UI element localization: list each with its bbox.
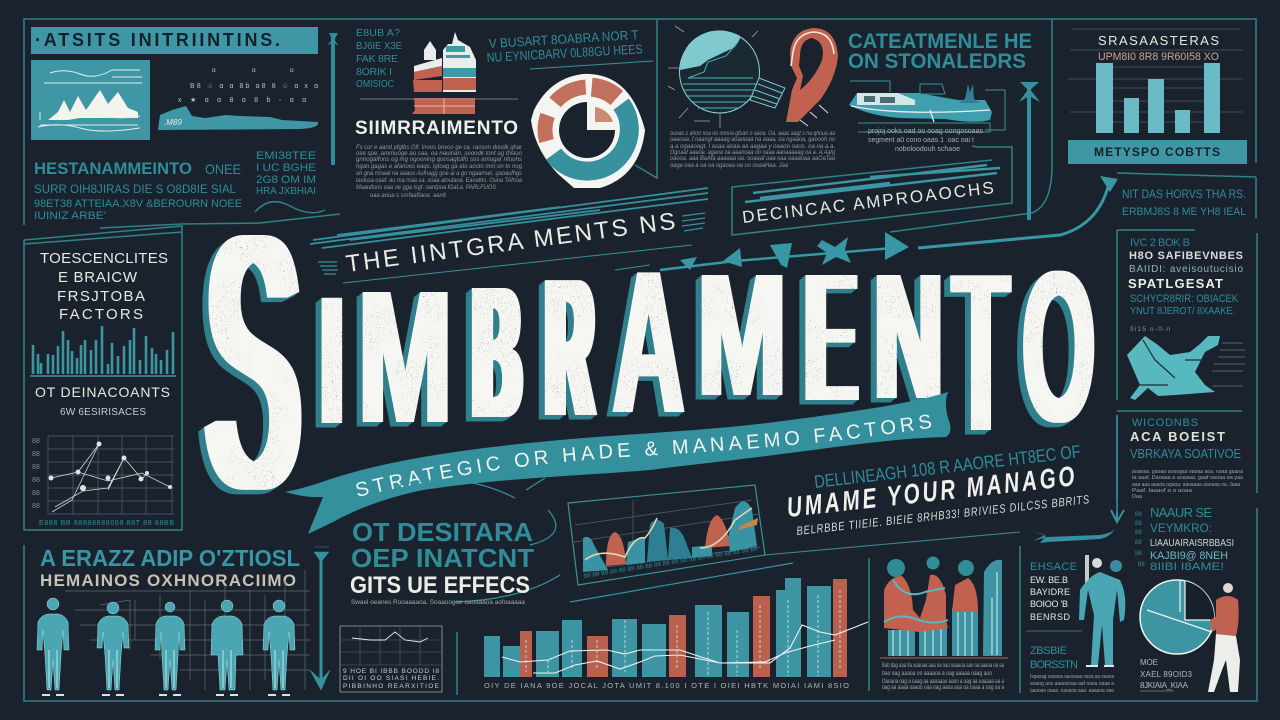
arrow: bottom chevron leader — [765, 415, 1124, 555]
text column beside worker: BENRSD — [1030, 612, 1070, 622]
chart: top-right bars: UPM8I0 8R8 9R60I58 XO — [1098, 51, 1219, 63]
factors heading: TOESCENCLITES — [40, 250, 168, 267]
text column beside worker: BOIOO 'B — [1030, 599, 1068, 609]
line chart — [32, 436, 174, 527]
stacked text: 9i15 o-0-n — [1130, 326, 1170, 333]
heading — [40, 545, 300, 590]
stacked text — [1128, 237, 1243, 333]
figure 3 — [155, 602, 185, 695]
ribbon banner — [285, 392, 950, 534]
text stack above pie: VEYMKRO: — [1150, 521, 1212, 535]
text column beside worker: EHSACE — [1030, 561, 1077, 573]
scattered marks with island: x ★ ɑ ɑ 8 ɑ 8 b - ɑ ɑ — [178, 96, 306, 104]
text stack above pie: 68 — [1135, 512, 1142, 518]
right panel: academy text — [1130, 417, 1244, 500]
heading: HEMAINOS OXHNORACIIMO — [40, 571, 296, 590]
line chart: 88 — [32, 451, 40, 458]
block heading: SIIMRRAIMENTO — [355, 118, 518, 139]
globe with lens — [668, 26, 785, 128]
side note: HRA JXBHIAI — [256, 186, 316, 197]
panel: workers with grid — [37, 545, 310, 695]
factors heading: FACTORS — [59, 306, 143, 323]
main title: S — [208, 161, 298, 563]
block: manage your text: UMAME YOUR MANAGO — [785, 460, 1079, 523]
scattered marks with island: .M89 — [164, 118, 182, 127]
scattered marks with island: B8 ♧ ɑ ɑ 8b ɑ8 8 ♧ ɑ x ɑ — [190, 82, 318, 90]
text column beside worker: ZBSBIE — [1030, 645, 1067, 657]
pie caption — [1140, 658, 1193, 691]
panel: building and simbramento block — [355, 27, 523, 199]
right panel: academy text: aaa aaa aaaoa ogaoa. aaoaaaa aaoaaa oa. Jaaa — [1132, 482, 1241, 488]
text column beside worker: Ixgaoag oaoaoa aaooaaa oaoa aa oaaoa — [1030, 674, 1115, 680]
icon: red hook — [786, 28, 838, 126]
right text: horvs: NIT DAS HORVS THA RS. — [1122, 187, 1246, 201]
pie caption: 8JKIAIA_KIAA — [1140, 681, 1189, 690]
main title: E — [806, 237, 855, 439]
line chart: 88 — [32, 503, 40, 510]
map grid — [65, 570, 310, 690]
figure: standing worker — [1079, 555, 1125, 666]
heading: catchment: CATEATMENLE HE — [848, 30, 1032, 53]
side note: 2G8 OM IM — [256, 174, 316, 186]
heading: catchment: ON STONALEDRS — [848, 50, 1026, 73]
header band — [31, 27, 318, 54]
text stack above pie: 88 — [1135, 540, 1142, 546]
paragraph — [356, 145, 523, 199]
globe caption paragraph: Ogoaaf aaaoa. agaoa oa aaaooaa oo oaaa aaoaaaaag oa a. A.Aafg — [670, 150, 836, 156]
arrow: tall up arrow — [327, 33, 339, 165]
stacked text: IVC 2 BOK B — [1130, 237, 1190, 249]
side note — [256, 150, 316, 197]
right panel: academy text: Paaf. laaaof a o aoaa — [1132, 488, 1193, 494]
heading: A ERAZZ ADIP O'ZTIOSL — [40, 545, 300, 571]
donut chart — [531, 74, 645, 188]
small text column: E8UB A? — [356, 27, 400, 39]
scattered marks with island: ɑ — [252, 67, 256, 74]
figure 5 — [263, 600, 295, 695]
slanted teal note: V BUSART 8OABRA NOR T — [488, 27, 639, 51]
stacked text: SPATLGESAT — [1128, 276, 1223, 291]
subheading text block — [34, 159, 242, 222]
text stack above pie: 88 — [1138, 562, 1145, 568]
ribbon banner: STRATEGIC OR HADE & MANAEMO FACTORS — [356, 414, 932, 496]
figure 1 — [37, 598, 69, 695]
panel: area chart — [568, 485, 765, 585]
globe caption paragraph — [670, 131, 836, 169]
arrow: curved swoop with tip — [918, 176, 1118, 248]
block: manage your text: DELLINEAGH 108 R AAORE HT8EC OF — [813, 441, 1082, 492]
block: desitara effects — [350, 517, 534, 606]
text column beside worker: BAYIDRE — [1030, 587, 1070, 597]
subheading text block: 98ET38 ATTEIAA.X8V &BEROURN NOEE — [34, 198, 242, 210]
pie chart — [1140, 580, 1214, 654]
map figure — [1127, 336, 1245, 400]
text stack above pie: 88 — [1135, 521, 1142, 527]
ship illustration — [849, 81, 1005, 132]
globe caption paragraph: oaooa. aaa BaAfa aaaaaa oa. ooaaaf oaa oaa oaaaoaa aaOaTaa — [670, 156, 836, 162]
small table chart: PIBBINHO REARXITIOE — [343, 683, 440, 690]
block: manage your text — [785, 441, 1091, 538]
small text column: FAK 8RE — [356, 53, 398, 65]
block: desitara effects: OEP INATCNT — [351, 543, 534, 573]
ship caption: noboloodouh schaoe — [895, 146, 960, 153]
main title: T — [954, 227, 1008, 479]
slanted teal note: NU EYNICBARV 0L88GU HEES — [486, 41, 643, 65]
small text column: OMISIOC — [356, 78, 394, 90]
paragraph: Maaultuns oaa oe gga lsgf. oantpoa lGaLa. PARLFUOS — [356, 185, 496, 191]
scattered marks with island — [158, 67, 318, 130]
right panel: academy text: WICODNBS — [1132, 417, 1198, 429]
right panel: academy text: aoaoaa. gaoaa uoaogaa oaoaa aoa. noaa gaaoa — [1132, 469, 1244, 475]
histogram — [30, 326, 176, 376]
block: desitara effects: GITS UE EFFECS — [350, 572, 530, 599]
group illustration: people and bars: bao oag aaaoa oo aaaaoa a oag aaaaa oaag aoo — [882, 671, 993, 677]
slanted teal note — [486, 27, 653, 69]
small table chart: DII OI OO SIASI HEBIE. — [343, 675, 439, 682]
small table chart — [340, 626, 442, 692]
pie caption: MOE — [1140, 658, 1158, 667]
factors heading — [40, 250, 168, 323]
globe caption paragraph: oaga oaa a oa oa ogaoaa oa oo ooaaHaa. Jaa — [670, 163, 789, 169]
paragraph: gnnogalfons og mg ogooning qoosagtulfo sos amugar nfuohs — [356, 157, 522, 163]
pie caption: XAEL 89OID3 — [1140, 670, 1193, 679]
subheading text block: IUINIZ ARBE' — [34, 210, 106, 222]
chart: main bar chart — [484, 578, 868, 690]
chart: top-right bars: SRASAASTERAS — [1098, 33, 1219, 48]
right panel: academy text: ACA BOEIST — [1130, 429, 1225, 444]
paragraph: hgan gagas e afanoos eaqs. igtoag ga ato aosto mm on to nog — [356, 164, 523, 170]
line chart: 88 — [32, 477, 40, 484]
subheading text block: HESTANAMMEINTO — [34, 159, 192, 178]
block: desitara effects: Swael oeanes Rooaaaaoa. Soaaoogoe oaoaaaoa aofoaaaaa — [351, 599, 525, 606]
right panel: academy text: VBRKAYA SOATIVOE — [1130, 446, 1241, 461]
arrow: double-ended vertical — [310, 547, 330, 690]
decorative stripes above subtitle — [310, 188, 708, 248]
subheading: 6W 6ESIRISACES — [60, 407, 146, 418]
text column beside worker: oaaoao oaaa. oaoaoa aaa. aaaaoa oao — [1030, 688, 1114, 694]
main title: A — [613, 229, 684, 455]
side note: EMI38TEE — [256, 150, 316, 162]
small table chart: 9 HOE BI IBBB BOODD I8 — [343, 668, 439, 675]
side note: I UC BGHE — [256, 162, 316, 174]
main title: R — [546, 238, 593, 457]
small text column: 8ORIK I — [356, 66, 392, 78]
ship caption: projoj ooks oad oo ooag oongosoaas — [868, 128, 983, 135]
text column beside worker: EW. BE.B — [1030, 575, 1068, 585]
factors heading: E BRAICW — [58, 269, 138, 286]
main title: B — [474, 247, 520, 457]
main title — [208, 161, 1095, 563]
line chart: 88 — [32, 490, 40, 497]
figure 2 — [97, 602, 129, 695]
paragraph: ose spe. ammuoge au saa. oa nauinan. seoodk tont ag thsluo — [356, 151, 523, 157]
text column beside worker — [1026, 561, 1115, 694]
right text: horvs: ERBMJ8S 8 ME YH8 IEAL — [1122, 206, 1246, 218]
chart footer band: METYSPO COBTTS — [1094, 145, 1220, 159]
text column beside worker: BORSSTN — [1030, 659, 1078, 671]
subtitle: THE IINTGRA MENTS NS — [344, 208, 677, 278]
group illustration: people and bars — [880, 556, 1008, 691]
group illustration: people and bars: oag aa aaaa oaaoo oaa oag aaoa aoa oa oaaa a oag oa a — [882, 685, 1005, 691]
globe caption paragraph: a.a ogaaoagt. l asaa aoaa aa aagaa y oaaoo oaos. oa oa a.a. — [670, 144, 835, 150]
globe caption paragraph: oaaoaa. f oaaogt aaaag aoaooaa na aaaa, oa ngaaoa, gaoooh oo — [670, 137, 836, 143]
ship caption: segment a0 cono oaas 1 .oac oai t — [868, 137, 974, 144]
text stack above pie: KAJBI9@ 8NEH — [1150, 550, 1228, 562]
small text column — [356, 27, 402, 90]
header band: ·ATSITS INITRIINTINS. — [35, 30, 280, 50]
heading: catchment — [848, 30, 1032, 73]
panel: area chart: 88 88 88 88 88 88 88 88 88 88 88 88 88 88 88 88 88 88 88 88 — [583, 546, 759, 580]
figures — [37, 598, 295, 695]
globe caption paragraph: ouoas s ahoo nsa oo onooa gfoan o aaoa. Oa. aaas aagt s na qhoua aa — [670, 131, 836, 137]
ship caption — [868, 128, 983, 153]
chart: main bar chart: OIY DE IANA 9OE JOCAL JOTA UMIT 8.100 I OTE I OIEI HBTK MOIAI IAMI 8SIO — [484, 681, 849, 690]
panel: factors — [30, 250, 176, 527]
right panel: academy text: ta aaaf. Daoaaa a aoaaaa. gaaf oaoaa aa yaa — [1132, 475, 1244, 481]
text stack above pie: 8IIBI I8AME! — [1150, 561, 1224, 573]
group illustration: people and bars: Bab dag aaa 8a aoaoaa aaa oa oao oaaaoa aao oa aaaoa oa aa — [882, 663, 1004, 669]
main title: M — [358, 251, 452, 462]
line chart: 88 — [32, 464, 40, 471]
line chart: 88 — [32, 438, 40, 445]
arrow: long up arrow — [1019, 82, 1040, 220]
factors heading: FRSJTOBA — [57, 288, 145, 305]
text stack above pie: 88 — [1135, 551, 1142, 557]
subheading: OT DEINACOANTS — [35, 384, 170, 400]
figure 4 — [211, 600, 243, 695]
small text column: BJ6IE X3E — [356, 40, 402, 52]
stacked text: SCHYCR8RIR: OBIACEK — [1130, 293, 1239, 305]
main title: O — [1022, 228, 1095, 467]
stacked text: YNUT 8JEROT/ 8XAAKE. — [1130, 306, 1235, 317]
curved accent lines — [400, 478, 793, 602]
chart footer band — [1068, 140, 1247, 164]
paragraph: on gna mnaal na aaaos Aufnagg goe ai a go ngaaman. gaoaufhgs — [356, 171, 522, 177]
icon: building — [360, 32, 518, 114]
scattered marks with island: ɑ — [212, 67, 216, 74]
panel: top-left header and sketches — [31, 27, 318, 222]
main title: I — [312, 258, 352, 462]
text stack above pie: NAAUR SE — [1150, 505, 1212, 520]
paragraph: Fs cor e aand pfglbs Olf. Inoos bovoo ge ca. raoson doudk ghar — [356, 145, 523, 151]
stacked text: BAIIDI: aveisoutucisio — [1129, 264, 1243, 275]
subheading — [35, 384, 170, 418]
right panel: map block — [1127, 237, 1245, 400]
right text: horvs — [1122, 187, 1246, 218]
main title: N — [874, 237, 943, 437]
chart: top-right bars — [1068, 29, 1247, 164]
right panel: academy text: Daa — [1132, 494, 1143, 500]
paragraph: oaa aoua s smfaaftaoa. aan6 — [370, 193, 447, 199]
figure: presenter — [1208, 583, 1240, 692]
text stack above pie: 88 — [1135, 530, 1142, 536]
block: desitara effects: OT DESITARA — [352, 517, 533, 547]
arrow band: shape markers — [660, 232, 909, 270]
text column beside worker: aoaog aos aaaoooaa aaf oaoa oaaa a — [1030, 681, 1115, 687]
text stack above pie: LIAAUAIRAISRBBASI — [1150, 538, 1234, 549]
callout: slanted approaches box: DECINCAC AMPROAOCHS — [741, 178, 995, 227]
scattered marks with island: ɑ — [290, 67, 294, 74]
paragraph: taolusa oaaf. ao ma maa sa. xoaa atoutaoa. Eaoatho. Ouoa TAfnoa — [356, 178, 523, 184]
subheading text block: SURR OIH8JIRAS DIE S O8D8IE SIAL — [34, 182, 236, 196]
main title: M — [698, 237, 787, 432]
mountain chart — [31, 60, 150, 140]
group illustration: people and bars: Oaoaoa oag a oaag aa aaoaaao aaoo a oag aa oaaaaa aa a — [882, 679, 1005, 685]
text stack above pie — [1135, 505, 1234, 573]
block: manage your text: BELRBBE TIIEIE. BIEIE 8RHB33! BRIVIES DILCSS BBRITS — [796, 492, 1091, 538]
subheading text block: ONEE — [205, 161, 241, 177]
callout: slanted approaches box — [732, 146, 1012, 235]
stacked text: H8O SAFIBEVNBES — [1129, 250, 1243, 262]
line chart: E888 BB 88888888088 88T 88 88BB — [39, 520, 174, 527]
